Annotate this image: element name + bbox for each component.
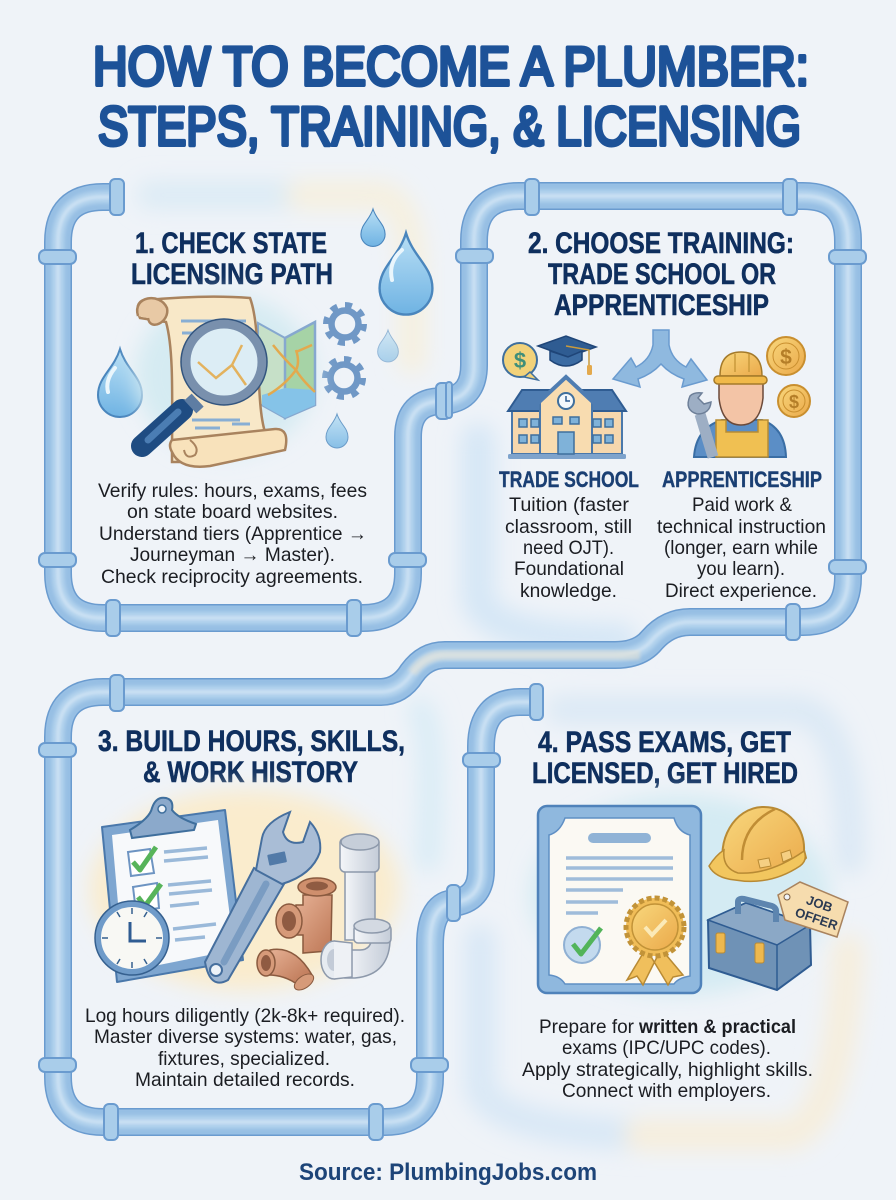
heading: step 4: 4. PASS EXAMS, GET [538,726,791,759]
heading: step 3: & WORK HISTORY [143,756,358,789]
heading: step 2: APPRENTICESHIP [554,289,769,322]
panel: step 4 [522,726,848,1102]
heading: step 4 [532,726,798,790]
text: step 1 body: Verify rules: hours, exams, fees [98,480,367,502]
icon: apprentice worker: $ [780,346,792,369]
icon: job offer tag: JOB [804,892,835,915]
text: step 3 body: fixtures, specialized. [158,1048,330,1070]
text: step 4 body: Prepare for [539,1016,634,1038]
heading: step 4: LICENSED, GET HIRED [532,757,798,790]
panel: step 1 [98,209,432,588]
column: apprenticeship: you learn). [697,558,785,580]
text: step 3 body: Log hours diligently (2k-8k+ required). [85,1005,405,1027]
icon: certificate [538,806,701,993]
illustration: certificate and job kit [530,795,848,995]
icon: hard hat [709,807,806,881]
heading: step 1: LICENSING PATH [131,258,333,291]
source line: Source: PlumbingJobs.com [299,1159,597,1186]
text: step 4 body [522,1016,813,1102]
heading: step 3: 3. BUILD HOURS, SKILLS, [98,725,405,758]
column: trade school: TRADE SCHOOL [499,467,639,492]
pipe network [58,196,848,1122]
heading: step 3 [98,725,405,789]
column: apprenticeship: APPRENTICESHIP [662,467,822,492]
pipe flanges [39,179,866,1140]
text: step 3 body: Master diverse systems: water, gas, [94,1026,397,1048]
text: step 1 body: Check reciprocity agreements. [101,566,363,588]
column: trade school: Tuition (faster [509,494,629,516]
text: step 1 body: Journeyman → Master). [130,544,335,566]
icon: PVC pipes [321,834,391,979]
title: HOW TO BECOME A PLUMBER: [93,35,809,97]
icon: apprentice worker: $ [789,392,799,412]
icon: job offer tag [778,882,848,937]
icon: clipboard [102,798,243,982]
heading: step 1 [131,227,333,291]
text: step 4 body: Apply strategically, highlight skills. [522,1059,813,1081]
text: step 3 body: Maintain detailed records. [135,1069,355,1091]
text: step 3 body [85,1005,405,1091]
icon: scroll, map and magnifier [135,295,315,467]
watercolor washes [150,195,850,1135]
heading: step 2: TRADE SCHOOL OR [548,258,776,291]
column: trade school: knowledge. [520,580,617,602]
icon: trade school: $ [514,348,526,373]
column: trade school: Foundational [514,558,624,580]
column: apprenticeship [657,467,826,602]
icon: apprentice worker [688,337,810,457]
panel: step 3 [85,725,405,1091]
illustration: tools and log [90,790,400,993]
icon: copper fittings [257,878,340,993]
text: step 1 body: Understand tiers (Apprentice → [99,523,367,545]
heading: step 1: 1. CHECK STATE [135,227,327,260]
column: apprenticeship: Paid work & [692,494,792,516]
icon: adjustable wrench [205,812,320,983]
title [93,35,809,157]
text: step 1 body: on state board websites. [127,501,338,523]
column: trade school: classroom, still [505,516,632,538]
column: trade school: need OJT). [523,537,614,559]
text: step 4 body: exams (IPC/UPC codes). [562,1037,771,1059]
icon: toolbox [708,899,811,990]
heading: step 2 [528,227,794,322]
arrow: fork left and right [613,330,707,387]
column: apprenticeship: (longer, earn while [664,537,818,559]
icon: water drops [98,209,432,448]
icon: gears [325,305,364,397]
heading: step 2: 2. CHOOSE TRAINING: [528,227,794,260]
panel: step 2 [499,227,826,602]
column: apprenticeship: Direct experience. [665,580,817,602]
column: trade school [499,467,639,602]
text: step 4 body: written & practical [638,1016,796,1038]
icon: clock [95,901,169,975]
text: step 4 body: Connect with employers. [562,1080,771,1102]
column: apprenticeship: technical instruction [657,516,826,538]
icon: job offer tag: OFFER [793,904,840,933]
text: step 1 body [98,480,367,588]
icon: trade school [503,336,626,459]
